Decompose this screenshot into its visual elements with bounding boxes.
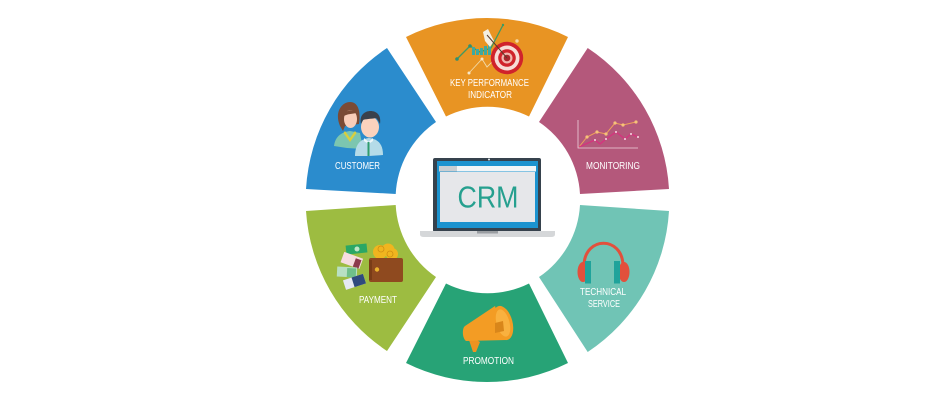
icon: chart and target (455, 24, 523, 74)
label: customer: CUSTOMER (335, 160, 380, 172)
label: technical service (580, 286, 626, 310)
icon: megaphone (463, 304, 517, 352)
label: technical service: SERVICE (588, 298, 620, 310)
label: key performance indicator: KEY PERFORMANCE (450, 77, 529, 89)
icon: wallet and banknotes (337, 243, 403, 290)
segment: monitoring (539, 48, 669, 194)
label: monitoring: MONITORING (586, 160, 640, 172)
segment: technical service (539, 205, 669, 352)
segment: promotion (406, 284, 568, 382)
segment: payment (306, 205, 436, 351)
segment: key performance indicator (406, 18, 568, 116)
label: promotion: PROMOTION (463, 355, 514, 367)
label: key performance indicator: INDICATOR (468, 89, 512, 101)
segment: customer (306, 48, 436, 194)
laptop (420, 158, 555, 237)
heading: CRM: CRM (458, 180, 518, 214)
icon: line chart (578, 120, 639, 148)
label: technical service: TECHNICAL (580, 286, 626, 298)
label: payment: PAYMENT (359, 294, 397, 306)
label: key performance indicator (450, 77, 529, 101)
icon: headphones (578, 243, 630, 284)
icon: two people (334, 102, 383, 156)
